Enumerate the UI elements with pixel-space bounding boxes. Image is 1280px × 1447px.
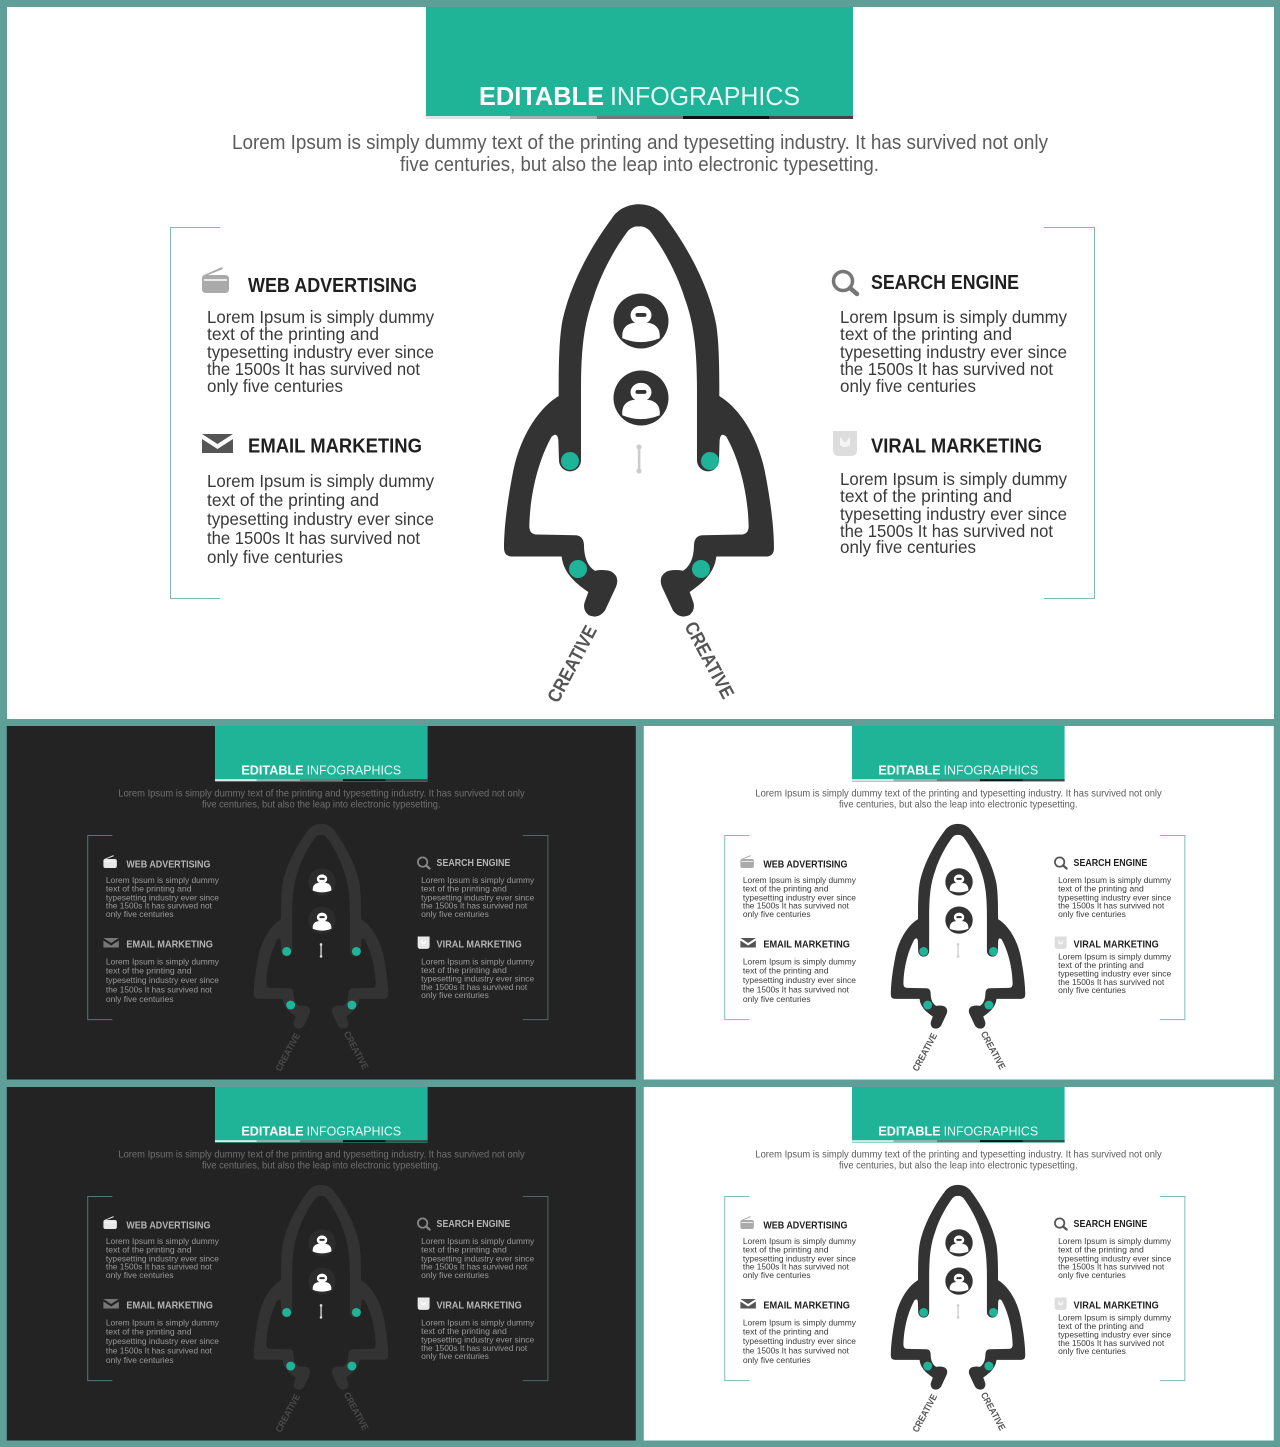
block: search engine: text of the printing and [1058,883,1144,893]
block: viral marketing: the 1500s It has survived not [1058,977,1165,987]
block: email marketing: text of the printing and [207,490,379,510]
block: email marketing: the 1500s It has survived not [743,1346,850,1356]
left bracket [88,1196,112,1381]
block: email marketing: Lorem Ipsum is simply dummy [106,1317,220,1327]
icon: shield [1055,937,1067,949]
title banner [215,726,428,782]
block: web advertising: Lorem Ipsum is simply dummy [743,1236,857,1246]
block: viral marketing [418,937,535,1000]
block: search engine: typesetting industry ever since [1058,1253,1171,1263]
icon: shield [418,1298,430,1310]
panel: dark thumbnail bottom left [7,1087,636,1441]
block: web advertising: the 1500s It has survived not [743,1262,850,1272]
block: search engine: only five centuries [840,376,976,396]
panel: main light slide [7,7,1274,719]
block: web advertising: typesetting industry ever since [106,1253,219,1263]
icon: shield [418,937,430,949]
block: viral marketing [833,431,1067,557]
block: email marketing: EMAIL MARKETING [248,436,422,458]
block: search engine: typesetting industry ever since [840,342,1067,362]
block: search engine: SEARCH ENGINE [437,1219,511,1230]
block: email marketing: typesetting industry ever since [106,1336,219,1346]
block: web advertising: text of the printing and [106,883,192,893]
block: viral marketing: typesetting industry ever since [421,1335,534,1345]
block: viral marketing: text of the printing and [1058,960,1144,970]
icon: envelope [202,434,233,453]
block: email marketing [740,938,857,1004]
block: email marketing: Lorem Ipsum is simply dummy [743,1317,857,1327]
block: search engine: Lorem Ipsum is simply dummy [1058,1236,1172,1246]
icon: magnifier [1055,1218,1067,1229]
rocket [891,824,1025,1029]
title banner: INFOGRAPHICS [307,1124,402,1139]
block: email marketing: only five centuries [743,994,811,1004]
block: viral marketing: the 1500s It has survived not [421,1343,528,1353]
label: right creative: CREATIVE [341,1391,370,1433]
block: email marketing: typesetting industry ever since [207,509,434,529]
icon: card [202,267,229,293]
icon: card [740,1216,754,1229]
block: search engine: only five centuries [421,909,489,919]
icon: card [103,855,117,868]
icon: magnifier [418,1218,430,1229]
label: right creative: CREATIVE [341,1030,370,1072]
block: search engine [418,1218,535,1280]
block: web advertising: the 1500s It has survived not [106,1262,213,1272]
block: web advertising: Lorem Ipsum is simply dummy [207,307,434,327]
block: web advertising: text of the printing and [743,1244,829,1254]
label: left creative: CREATIVE [274,1392,303,1434]
title banner: EDITABLE [878,1124,941,1139]
block: viral marketing: text of the printing and [421,965,507,975]
subtitle: five centuries, but also the leap into electronic typesetting. [839,799,1078,810]
title banner: INFOGRAPHICS [610,81,800,111]
block: web advertising: WEB ADVERTISING [126,1221,211,1231]
left bracket [88,835,112,1020]
subtitle [755,1150,1162,1171]
block: viral marketing: text of the printing and [1058,1321,1144,1331]
block: web advertising: typesetting industry ever since [207,342,434,362]
block: viral marketing: Lorem Ipsum is simply dummy [1058,1312,1172,1322]
label: left creative: CREATIVE [911,1031,940,1073]
block: email marketing: Lorem Ipsum is simply dummy [207,471,434,491]
rocket [254,1185,388,1390]
rocket [504,204,774,617]
block: web advertising: only five centuries [207,376,343,396]
rocket [254,824,388,1029]
block: email marketing: text of the printing and [106,966,192,976]
block: search engine: the 1500s It has survived not [421,901,528,911]
left bracket [725,835,749,1020]
block: web advertising: typesetting industry ever since [743,1253,856,1263]
title banner: EDITABLE [479,81,604,111]
block: viral marketing: the 1500s It has survived not [1058,1338,1165,1348]
block: viral marketing: only five centuries [421,990,489,1000]
block: web advertising: WEB ADVERTISING [248,275,417,297]
block: viral marketing: text of the printing and [421,1326,507,1336]
title banner [426,7,853,119]
block: viral marketing: VIRAL MARKETING [1074,1300,1159,1311]
block: email marketing: EMAIL MARKETING [126,1300,213,1311]
block: web advertising: WEB ADVERTISING [763,1221,848,1231]
subtitle: five centuries, but also the leap into electronic typesetting. [400,154,879,176]
block: search engine: only five centuries [1058,1270,1126,1280]
block: web advertising: the 1500s It has survived not [207,359,420,379]
title banner [852,726,1065,782]
block: email marketing: the 1500s It has survived not [106,1346,213,1356]
block: web advertising: typesetting industry ever since [106,892,219,902]
block: search engine: the 1500s It has survived not [840,359,1053,379]
subtitle: five centuries, but also the leap into electronic typesetting. [839,1160,1078,1171]
rocket [891,1185,1025,1390]
block: web advertising [740,1216,857,1280]
icon: card [740,855,754,868]
block: email marketing: the 1500s It has survived not [207,528,420,548]
icon: envelope [103,1299,119,1308]
icon: magnifier [834,272,857,294]
icon: shield [833,431,857,456]
block: email marketing [740,1299,857,1365]
subtitle: five centuries, but also the leap into electronic typesetting. [202,799,441,810]
block: web advertising: text of the printing and [106,1244,192,1254]
block: search engine: text of the printing and [840,324,1012,344]
block: search engine: typesetting industry ever since [421,892,534,902]
right bracket [1044,228,1094,598]
block: email marketing [103,938,220,1004]
title banner: INFOGRAPHICS [944,763,1039,778]
block: web advertising [103,855,220,919]
icon: envelope [103,938,119,947]
title banner: INFOGRAPHICS [944,1124,1039,1139]
block: web advertising [202,267,434,396]
block: viral marketing: VIRAL MARKETING [871,436,1042,458]
subtitle: Lorem Ipsum is simply dummy text of the printing and typesetting industry. It has survived not only [755,1150,1162,1160]
block: email marketing: only five centuries [743,1355,811,1365]
block: viral marketing: typesetting industry ever since [840,504,1067,524]
icon: envelope [740,938,756,947]
block: search engine [834,272,1067,396]
icon: magnifier [1055,857,1067,868]
block: email marketing [202,434,434,567]
icon: card [103,1216,117,1229]
block: web advertising: text of the printing and [743,883,829,893]
subtitle: Lorem Ipsum is simply dummy text of the printing and typesetting industry. It has survived not only [118,1150,525,1160]
block: web advertising: Lorem Ipsum is simply dummy [743,875,857,885]
block: web advertising: Lorem Ipsum is simply dummy [106,1236,220,1246]
block: search engine: SEARCH ENGINE [871,272,1019,294]
panel: light thumbnail bottom right [644,1087,1274,1441]
block: web advertising: only five centuries [743,909,811,919]
block: email marketing: typesetting industry ever since [106,975,219,985]
left bracket [725,1196,749,1381]
block: search engine: Lorem Ipsum is simply dummy [421,1236,535,1246]
block: viral marketing: VIRAL MARKETING [1074,939,1159,950]
title banner: EDITABLE [878,763,941,778]
title banner: EDITABLE [241,763,304,778]
subtitle: Lorem Ipsum is simply dummy text of the printing and typesetting industry. It has survived not only [232,132,1048,154]
icon: magnifier [418,857,430,868]
block: viral marketing: VIRAL MARKETING [437,939,522,950]
block: web advertising: WEB ADVERTISING [763,860,848,870]
title banner [852,1087,1065,1143]
panel: dark thumbnail top left [7,726,636,1080]
block: search engine: Lorem Ipsum is simply dummy [840,307,1067,327]
label: left creative: CREATIVE [274,1031,303,1073]
label: right creative: CREATIVE [680,618,738,703]
block: search engine: the 1500s It has survived not [421,1262,528,1272]
block: viral marketing [1055,1298,1172,1356]
subtitle: Lorem Ipsum is simply dummy text of the printing and typesetting industry. It has survived not only [118,789,525,799]
block: search engine: text of the printing and [1058,1244,1144,1254]
block: email marketing: EMAIL MARKETING [126,939,213,950]
block: viral marketing [418,1298,535,1361]
block: viral marketing: only five centuries [1058,985,1126,995]
block: email marketing: typesetting industry ever since [743,975,856,985]
block: email marketing [103,1299,220,1365]
block: search engine: the 1500s It has survived not [1058,1262,1165,1272]
block: email marketing: text of the printing and [106,1327,192,1337]
label: left creative: CREATIVE [911,1392,940,1434]
block: email marketing: the 1500s It has survived not [743,985,850,995]
title banner: INFOGRAPHICS [307,763,402,778]
block: search engine: only five centuries [421,1270,489,1280]
right bracket [523,1196,548,1381]
block: search engine: SEARCH ENGINE [437,858,511,869]
subtitle: Lorem Ipsum is simply dummy text of the printing and typesetting industry. It has survived not only [755,789,1162,799]
block: search engine: typesetting industry ever since [1058,892,1171,902]
block: viral marketing [1055,937,1172,995]
block: web advertising: Lorem Ipsum is simply dummy [106,875,220,885]
block: search engine: typesetting industry ever since [421,1253,534,1263]
block: search engine [1055,857,1172,919]
label: left creative: CREATIVE [544,622,602,706]
block: viral marketing: typesetting industry ever since [421,974,534,984]
right bracket [1160,835,1185,1020]
block: web advertising [103,1216,220,1280]
block: email marketing: the 1500s It has survived not [106,985,213,995]
block: search engine [418,857,535,919]
icon: shield [1055,1298,1067,1310]
block: search engine: only five centuries [1058,909,1126,919]
block: search engine: SEARCH ENGINE [1074,1219,1148,1230]
block: viral marketing: text of the printing and [840,486,1012,506]
block: web advertising: WEB ADVERTISING [126,860,211,870]
block: search engine: SEARCH ENGINE [1074,858,1148,869]
block: web advertising: only five centuries [743,1270,811,1280]
block: search engine: the 1500s It has survived not [1058,901,1165,911]
block: viral marketing: Lorem Ipsum is simply dummy [421,956,535,966]
block: web advertising: the 1500s It has survived not [106,901,213,911]
block: viral marketing: Lorem Ipsum is simply dummy [1058,951,1172,961]
block: viral marketing: typesetting industry ever since [1058,1330,1171,1340]
block: search engine [1055,1218,1172,1280]
block: email marketing: typesetting industry ever since [743,1336,856,1346]
block: web advertising: text of the printing and [207,324,379,344]
icon: envelope [740,1299,756,1308]
block: email marketing: Lorem Ipsum is simply dummy [743,956,857,966]
left bracket [170,228,220,598]
block: web advertising [740,855,857,919]
block: viral marketing: only five centuries [840,537,976,557]
block: search engine: text of the printing and [421,883,507,893]
block: email marketing: EMAIL MARKETING [763,939,850,950]
block: viral marketing: the 1500s It has survived not [421,982,528,992]
block: search engine: text of the printing and [421,1244,507,1254]
block: viral marketing: typesetting industry ever since [1058,969,1171,979]
title banner: EDITABLE [241,1124,304,1139]
panel: light thumbnail top right [644,726,1274,1080]
label: right creative: CREATIVE [978,1030,1007,1072]
block: email marketing: text of the printing and [743,966,829,976]
block: web advertising: only five centuries [106,909,174,919]
block: search engine: Lorem Ipsum is simply dummy [421,875,535,885]
block: web advertising: the 1500s It has survived not [743,901,850,911]
right bracket [1160,1196,1185,1381]
right bracket [523,835,548,1020]
label: right creative: CREATIVE [978,1391,1007,1433]
subtitle [755,789,1162,810]
block: web advertising: only five centuries [106,1270,174,1280]
block: search engine: Lorem Ipsum is simply dummy [1058,875,1172,885]
block: email marketing: only five centuries [106,994,174,1004]
subtitle [118,1150,525,1171]
subtitle [232,132,1048,176]
block: email marketing: only five centuries [106,1355,174,1365]
block: web advertising: typesetting industry ever since [743,892,856,902]
title banner [215,1087,428,1143]
block: email marketing: EMAIL MARKETING [763,1300,850,1311]
block: viral marketing: only five centuries [421,1351,489,1361]
block: viral marketing: only five centuries [1058,1346,1126,1356]
block: email marketing: Lorem Ipsum is simply dummy [106,956,220,966]
block: viral marketing: Lorem Ipsum is simply dummy [421,1317,535,1327]
subtitle [118,789,525,810]
block: email marketing: text of the printing and [743,1327,829,1337]
block: viral marketing: VIRAL MARKETING [437,1300,522,1311]
block: email marketing: only five centuries [207,547,343,567]
block: viral marketing: the 1500s It has survived not [840,521,1053,541]
subtitle: five centuries, but also the leap into electronic typesetting. [202,1160,441,1171]
block: viral marketing: Lorem Ipsum is simply dummy [840,469,1067,489]
